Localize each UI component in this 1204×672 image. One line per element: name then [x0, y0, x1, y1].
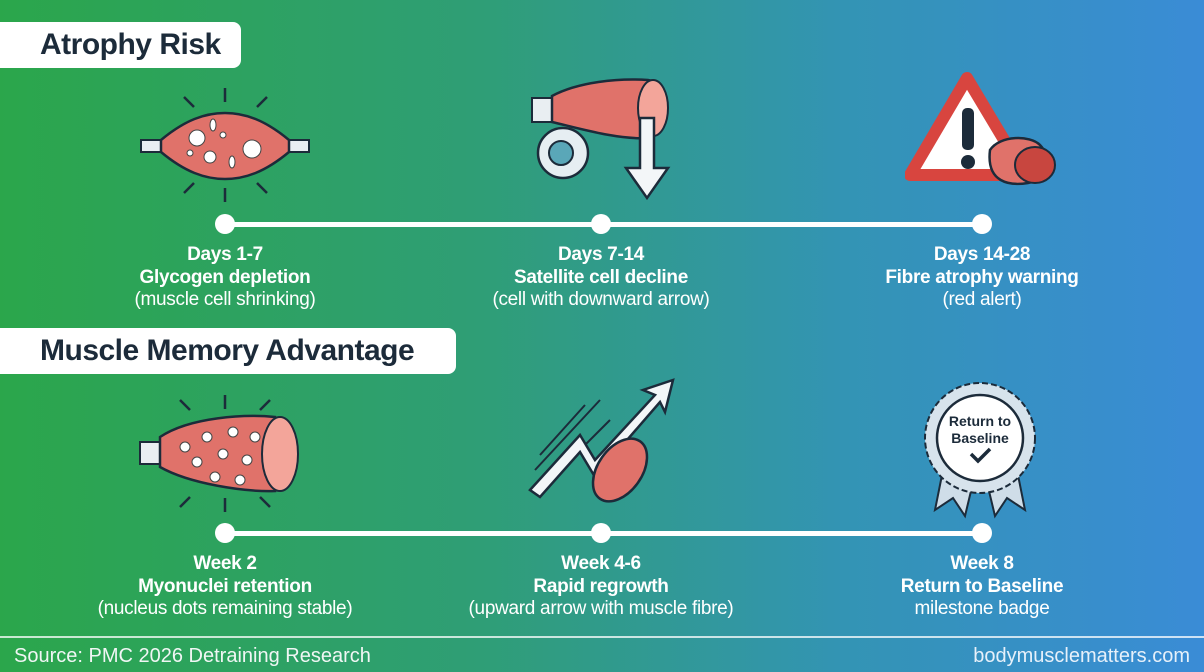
- label: Week 4-6: Rapid regrowth: [533, 576, 669, 596]
- footer: source: Source: PMC 2026 Detraining Research: [14, 645, 371, 667]
- icon: upward arrow with muscle fibre: [528, 378, 675, 503]
- label: Week 4-6: [469, 553, 733, 619]
- label: Days 14-28: [885, 244, 1079, 310]
- label: Days 14-28: Fibre atrophy warning: [885, 266, 1079, 288]
- label: Week 4-6: (upward arrow with muscle fibre): [469, 598, 733, 619]
- label: Week 8: milestone badge: [915, 598, 1049, 619]
- label: Week 2: Week 2: [193, 553, 257, 574]
- label: Days 14-28: Days 14-28: [934, 244, 1030, 265]
- label: Week 2: Myonuclei retention: [138, 576, 312, 596]
- icon: milestone badge: Baseline: [951, 430, 1009, 446]
- label: Week 4-6: Week 4-6: [561, 553, 641, 574]
- timeline 2: [215, 523, 992, 543]
- label: Days 14-28: (red alert): [942, 289, 1022, 310]
- icon: muscle cell shrinking: [140, 88, 310, 202]
- label: Days 1-7: [134, 244, 316, 310]
- icon: myonuclei retention: [139, 395, 299, 512]
- icon: satellite cell with down arrow: [531, 78, 670, 200]
- title: Atrophy Risk: Atrophy Risk: [40, 28, 221, 61]
- label: Days 7-14: Days 7-14: [558, 244, 644, 265]
- title: Atrophy Risk: [0, 22, 241, 68]
- title: Muscle Memory Advantage: Muscle Memory Advantage: [40, 334, 414, 367]
- label: Days 1-7: Glycogen depletion: [140, 266, 310, 288]
- label: Days 7-14: (cell with downward arrow): [492, 289, 710, 310]
- label: Days 1-7: (muscle cell shrinking): [134, 289, 316, 310]
- timeline 1: [215, 214, 992, 234]
- footer: website: bodymusclematters.com: [973, 645, 1190, 667]
- icon: milestone badge: [924, 382, 1036, 518]
- label: Week 8: [901, 553, 1063, 619]
- label: Week 2: [98, 553, 352, 619]
- label: Days 7-14: Satellite cell decline: [514, 266, 688, 288]
- label: Days 7-14: [492, 244, 710, 310]
- label: Days 1-7: Days 1-7: [187, 244, 263, 265]
- icon: red alert: [905, 72, 1056, 186]
- label: Week 8: Return to Baseline: [901, 576, 1063, 596]
- label: Week 8: Week 8: [950, 553, 1014, 574]
- label: Week 2: (nucleus dots remaining stable): [98, 598, 352, 619]
- title: Muscle Memory Advantage: [0, 328, 456, 374]
- icon: milestone badge: Return to: [949, 413, 1011, 429]
